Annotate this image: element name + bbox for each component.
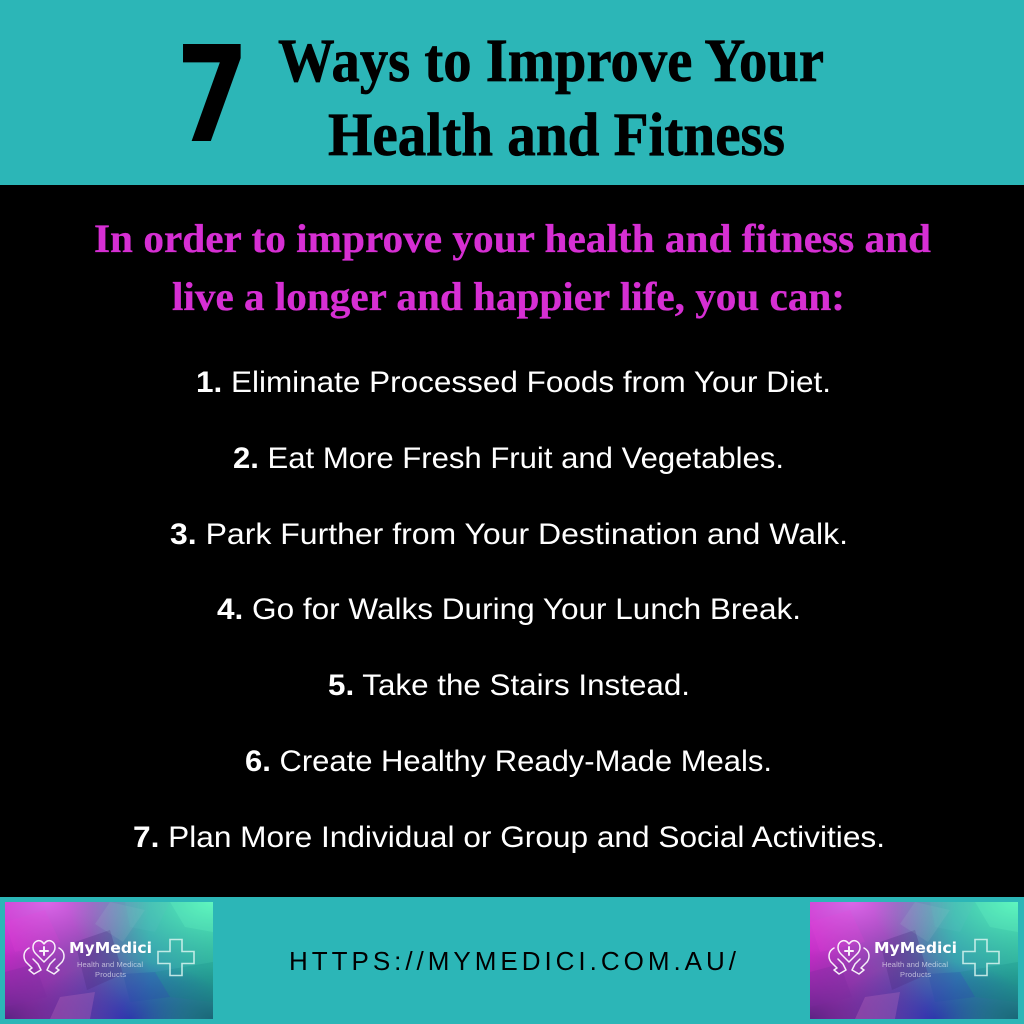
logo tagline: Health and Medical [77, 960, 143, 969]
icon: medical cross [963, 940, 999, 976]
header band [0, 0, 1024, 185]
logo name: MyMedici [874, 939, 957, 957]
title: Health and Fitness [328, 102, 785, 169]
website url: HTTPS://MYMEDICI.COM.AU/ [289, 946, 737, 976]
logo tagline [882, 960, 948, 979]
subheading [94, 216, 931, 319]
logo tagline: Health and Medical [882, 960, 948, 969]
item 4: 4. Go for Walks During Your Lunch Break. [217, 593, 801, 626]
icon: hands holding heart [24, 941, 64, 974]
item 2: 2. Eat More Fresh Fruit and Vegetables. [233, 442, 784, 475]
logo tagline: Products [95, 970, 126, 979]
icon: hands holding heart [829, 941, 869, 974]
list of seven ways [133, 366, 885, 854]
subheading: live a longer and happier life, you can: [172, 274, 845, 319]
logo name: MyMedici [69, 939, 152, 957]
item 1: 1. Eliminate Processed Foods from Your Diet. [196, 366, 831, 399]
icon: medical cross [158, 940, 194, 976]
item 7: 7. Plan More Individual or Group and Social Activities. [133, 821, 885, 854]
big number 7: 7 [176, 19, 249, 173]
logo tagline: Products [900, 970, 931, 979]
item 3: 3. Park Further from Your Destination and Walk. [170, 518, 848, 551]
item 5: 5. Take the Stairs Instead. [328, 669, 690, 702]
item 6: 6. Create Healthy Ready-Made Meals. [245, 745, 772, 778]
subheading: In order to improve your health and fitness and [94, 216, 931, 261]
logo right [810, 902, 1018, 1019]
logo tagline [77, 960, 143, 979]
title [278, 28, 824, 169]
logo left [5, 902, 213, 1019]
footer band [0, 897, 1024, 1024]
title: Ways to Improve Your [278, 28, 824, 95]
